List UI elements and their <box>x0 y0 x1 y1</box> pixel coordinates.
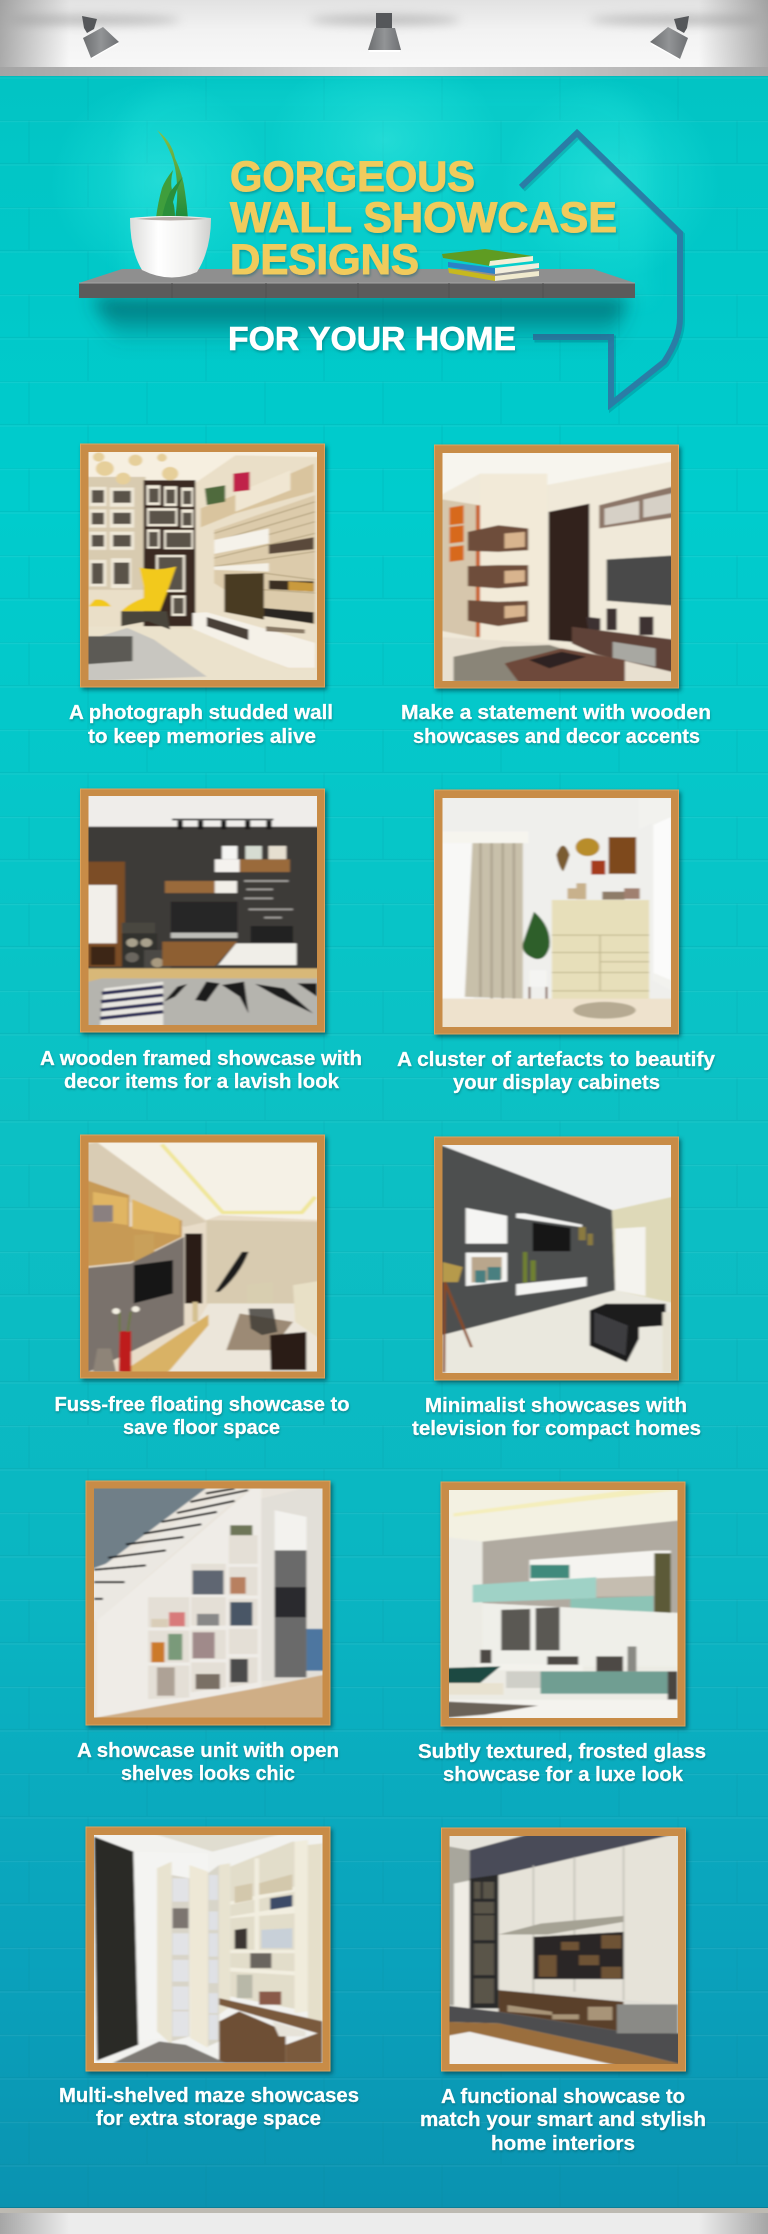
caption: open shelves unit: A showcase unit with open <box>77 1739 339 1762</box>
caption: wooden showcases: Make a statement with wooden <box>401 701 711 724</box>
icon: stack of books <box>442 249 539 281</box>
caption: frosted glass showcase <box>418 1740 706 1786</box>
caption: wooden framed showcase <box>40 1047 362 1093</box>
icon: left spotlight <box>82 16 119 59</box>
caption: floating showcase <box>54 1393 350 1439</box>
panel: wooden showcases <box>434 445 678 688</box>
ceiling with spotlights <box>0 0 768 76</box>
caption: open shelves unit <box>77 1739 339 1785</box>
caption: wooden showcases: showcases and decor accents <box>413 725 700 748</box>
caption: frosted glass showcase: showcase for a luxe look <box>443 1763 684 1786</box>
floor band <box>0 2207 768 2234</box>
spotlight glow on wall <box>50 50 720 300</box>
panel: multi-shelved maze showcases <box>86 1827 330 2071</box>
caption: functional showcase <box>420 2085 706 2155</box>
title: GORGEOUS <box>230 153 475 201</box>
caption: minimalist showcases: Minimalist showcases with <box>425 1394 687 1417</box>
panel: minimalist showcases <box>434 1137 678 1380</box>
caption: open shelves unit: shelves looks chic <box>121 1762 295 1785</box>
shelf board <box>79 269 635 298</box>
caption: frosted glass showcase: Subtly textured, frosted glass <box>418 1740 706 1763</box>
icon: house outline arrow <box>521 133 682 406</box>
caption: multi-shelved maze showcases: Multi-shelved maze showcases <box>59 2084 359 2107</box>
caption: cluster of artefacts: A cluster of artefacts to beautify <box>397 1048 716 1071</box>
caption: multi-shelved maze showcases <box>59 2084 359 2130</box>
panel: floating showcase <box>80 1135 324 1378</box>
caption: multi-shelved maze showcases: for extra storage space <box>96 2107 321 2130</box>
panel: photograph studded wall <box>80 444 324 687</box>
caption: functional showcase: match your smart and stylish <box>420 2108 706 2131</box>
panel: functional showcase <box>442 1828 686 2071</box>
icon: center spotlight <box>368 13 401 52</box>
subtitle: FOR YOUR HOME <box>228 320 516 357</box>
caption: minimalist showcases: television for compact homes <box>412 1417 701 1440</box>
caption: wooden framed showcase: A wooden framed showcase with <box>40 1047 362 1070</box>
caption: functional showcase: A functional showcase to <box>441 2085 685 2108</box>
caption: cluster of artefacts: your display cabinets <box>453 1071 660 1094</box>
caption: wooden framed showcase: decor items for a lavish look <box>64 1070 340 1093</box>
title: DESIGNS <box>230 236 419 284</box>
caption: wooden showcases <box>401 701 711 748</box>
chandelier <box>93 452 178 485</box>
caption: photograph wall <box>69 701 333 748</box>
caption: minimalist showcases <box>412 1394 701 1440</box>
icon: potted plant <box>130 130 211 278</box>
title: WALL SHOWCASE <box>230 194 617 242</box>
caption: cluster of artefacts <box>397 1048 716 1094</box>
caption: floating showcase: save floor space <box>123 1416 280 1439</box>
panel: open shelves unit <box>86 1481 330 1725</box>
caption: functional showcase: home interiors <box>491 2132 635 2155</box>
title <box>230 153 617 284</box>
panel: frosted glass showcase <box>441 1482 685 1726</box>
icon: right spotlight <box>650 16 689 60</box>
caption: photograph wall: to keep memories alive <box>88 725 316 748</box>
caption: floating showcase: Fuss-free floating showcase to <box>54 1393 350 1416</box>
caption: photograph wall: A photograph studded wall <box>69 701 333 724</box>
panel: cluster of artefacts <box>434 790 678 1034</box>
panel: wooden framed showcase <box>80 789 324 1032</box>
shelf with plant and books <box>79 130 635 345</box>
